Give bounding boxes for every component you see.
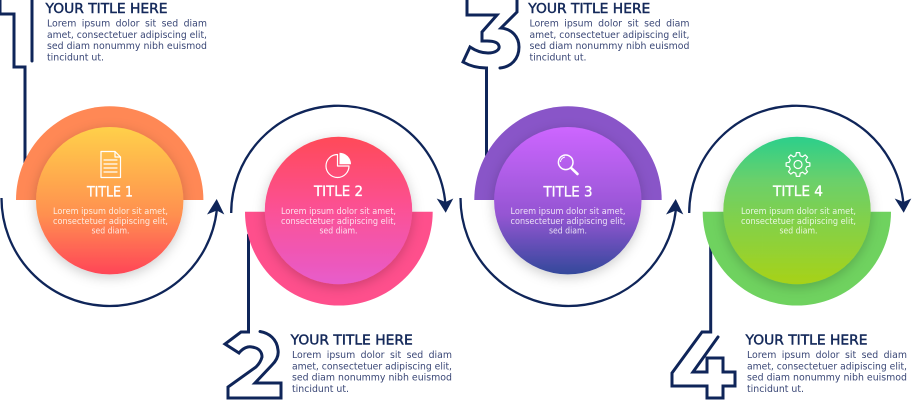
half disc 4 [703,212,891,306]
description 4: sed diam. [780,227,818,237]
body 2 [292,350,452,395]
description 2: sed diam. [320,227,358,237]
body 4: Lorem ipsum dolor sit sed diam [747,350,907,361]
description 2: consectetuer adipiscing elit, [281,217,396,227]
arrow 4 [689,106,911,213]
description 3: Lorem ipsum dolor sit amet, [510,207,626,217]
step 3 circle [474,106,662,274]
text block 2 [290,333,452,395]
numeral 1 with connector [0,0,32,165]
step 4 circle [703,137,891,306]
title 1 label: TITLE 1 [86,184,133,200]
body 3 [530,19,690,64]
step 1 circle [16,106,203,274]
description 3 [510,207,626,237]
body 1: Lorem ipsum dolor sit sed diam [47,19,207,30]
body 4: sed diam nonummy nibh euismod [747,372,907,384]
description 1 [53,207,168,237]
description 4 [741,207,856,237]
icon: document [101,152,120,178]
body 4: tincidunt ut. [747,384,804,395]
body 2: sed diam nonummy nibh euismod [292,372,452,384]
body 3: amet, consectetuer adipiscing elit, [530,30,690,41]
text block 3 [527,2,690,64]
body 2: amet, consectetuer adipiscing elit, [292,361,452,372]
inner circle 2 [265,137,412,284]
icon: gear [786,153,810,176]
icon: magnifier [558,155,578,174]
title 2 label: TITLE 2 [313,183,363,200]
numeral 3 with connector [463,0,519,155]
body 2: tincidunt ut. [292,384,349,395]
text block 4 [744,333,907,395]
arrow 2 [231,106,453,213]
body 1: amet, consectetuer adipiscing elit, [47,30,207,41]
description 1: Lorem ipsum dolor sit amet, [53,207,168,217]
half disc 1 [16,106,203,200]
body 3: Lorem ipsum dolor sit sed diam [530,19,690,30]
body 3: tincidunt ut. [530,52,586,64]
body 4: amet, consectetuer adipiscing elit, [747,361,907,372]
body 1 [47,19,207,64]
numeral 4 with connector [672,235,735,398]
inner circle 3 [494,127,642,274]
numeral 2 with connector [225,235,281,398]
description 2 [281,207,396,237]
heading 1: YOUR TITLE HERE [44,2,168,17]
inner circle 4 [723,137,871,284]
body 2: Lorem ipsum dolor sit sed diam [292,350,452,361]
body 4 [747,350,907,395]
description 3: consectetuer adipiscing elit, [510,217,626,227]
arrow 3 [460,198,683,306]
description 1: consectetuer adipiscing elit, [53,217,168,227]
heading 4: YOUR TITLE HERE [744,333,868,348]
description 3: sed diam. [549,227,587,237]
description 2: Lorem ipsum dolor sit amet, [281,207,396,217]
body 3: sed diam nonummy nibh euismod [530,41,690,52]
inner circle 1 [36,127,183,274]
step 2 circle [245,137,433,306]
description 4: consectetuer adipiscing elit, [741,217,856,227]
description 1: sed diam. [92,227,130,237]
title 3 label: TITLE 3 [543,184,592,200]
text block 1 [44,2,207,64]
title 4 label: TITLE 4 [772,183,823,200]
body 1: sed diam nonummy nibh euismod [47,41,207,52]
heading 3: YOUR TITLE HERE [527,2,650,17]
half disc 2 [245,212,433,306]
heading 2: YOUR TITLE HERE [290,333,413,348]
half disc 3 [474,106,662,200]
icon: pie chart [326,153,351,178]
description 4: Lorem ipsum dolor sit amet, [741,207,856,217]
arrow 1 [2,198,224,306]
body 1: tincidunt ut. [47,52,104,64]
